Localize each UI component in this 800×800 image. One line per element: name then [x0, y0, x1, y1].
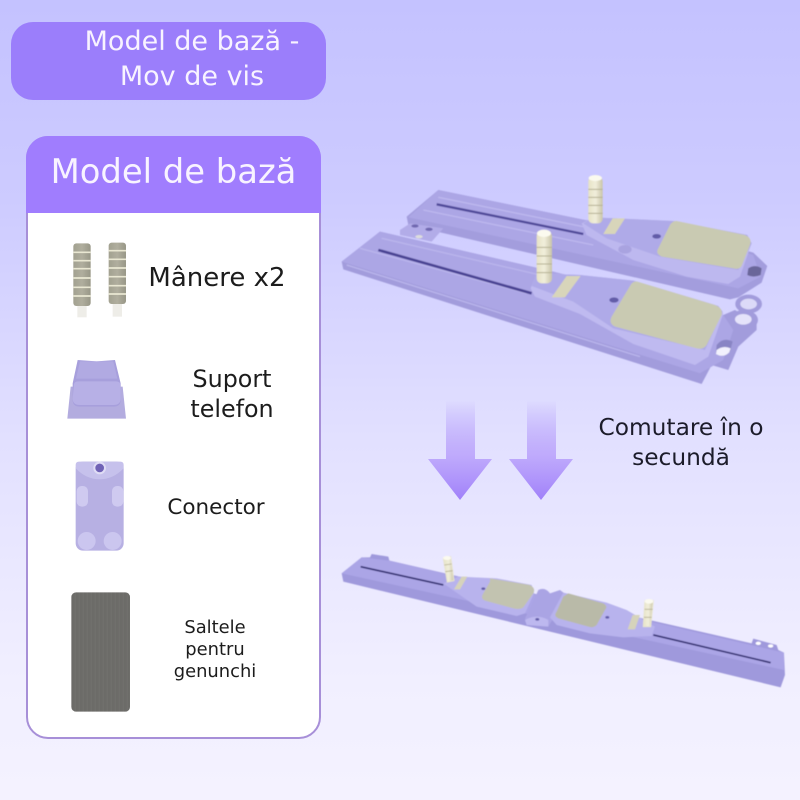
- label: one second switch: [598, 414, 764, 471]
- icon: handles: [73, 243, 126, 317]
- label: phone stand: telefon: [190, 394, 274, 422]
- back foot plate: [582, 217, 752, 284]
- icon: connector: [76, 462, 124, 551]
- label: knee mats: Saltele: [184, 617, 246, 638]
- front rail: [342, 232, 758, 384]
- panel: contents of basic model: [26, 136, 321, 739]
- product: unfolded trainer: [342, 554, 785, 687]
- right foot plate: [550, 593, 655, 637]
- back handle: [588, 175, 603, 223]
- icon: knee mat: [71, 592, 130, 712]
- badge title text: [85, 26, 299, 92]
- connector piece: [400, 223, 443, 242]
- left foot plate: [443, 577, 534, 616]
- arrow: left switch arrow: [428, 400, 492, 500]
- badge: model name: [11, 22, 326, 100]
- long rail: [342, 554, 785, 687]
- label: knee mats: pentru: [185, 639, 245, 660]
- label: phone stand: Suport: [193, 365, 271, 393]
- label: knee mats: [174, 617, 256, 682]
- arrow: right switch arrow: [509, 400, 573, 500]
- label: one second switch: Comutare în o: [598, 414, 764, 441]
- badge title text: Mov de vis: [120, 61, 264, 92]
- label: handles: Mânere x2: [148, 263, 286, 293]
- icon: phone stand: [67, 360, 126, 419]
- front foot plate: [531, 273, 723, 365]
- back rail: [407, 190, 767, 313]
- product: folded trainer pair: [342, 175, 767, 384]
- panel header: Model de bază: [51, 152, 296, 191]
- label: one second switch: secundă: [632, 444, 730, 471]
- label: phone stand: [190, 365, 274, 422]
- label: knee mats: genunchi: [174, 661, 256, 682]
- panel header: [26, 136, 321, 213]
- label: connector: Conector: [167, 495, 265, 520]
- right handle: [643, 599, 653, 627]
- badge title text: Model de bază -: [85, 26, 299, 57]
- front handle: [537, 230, 552, 283]
- left handle: [443, 556, 454, 582]
- hinge: [525, 589, 567, 627]
